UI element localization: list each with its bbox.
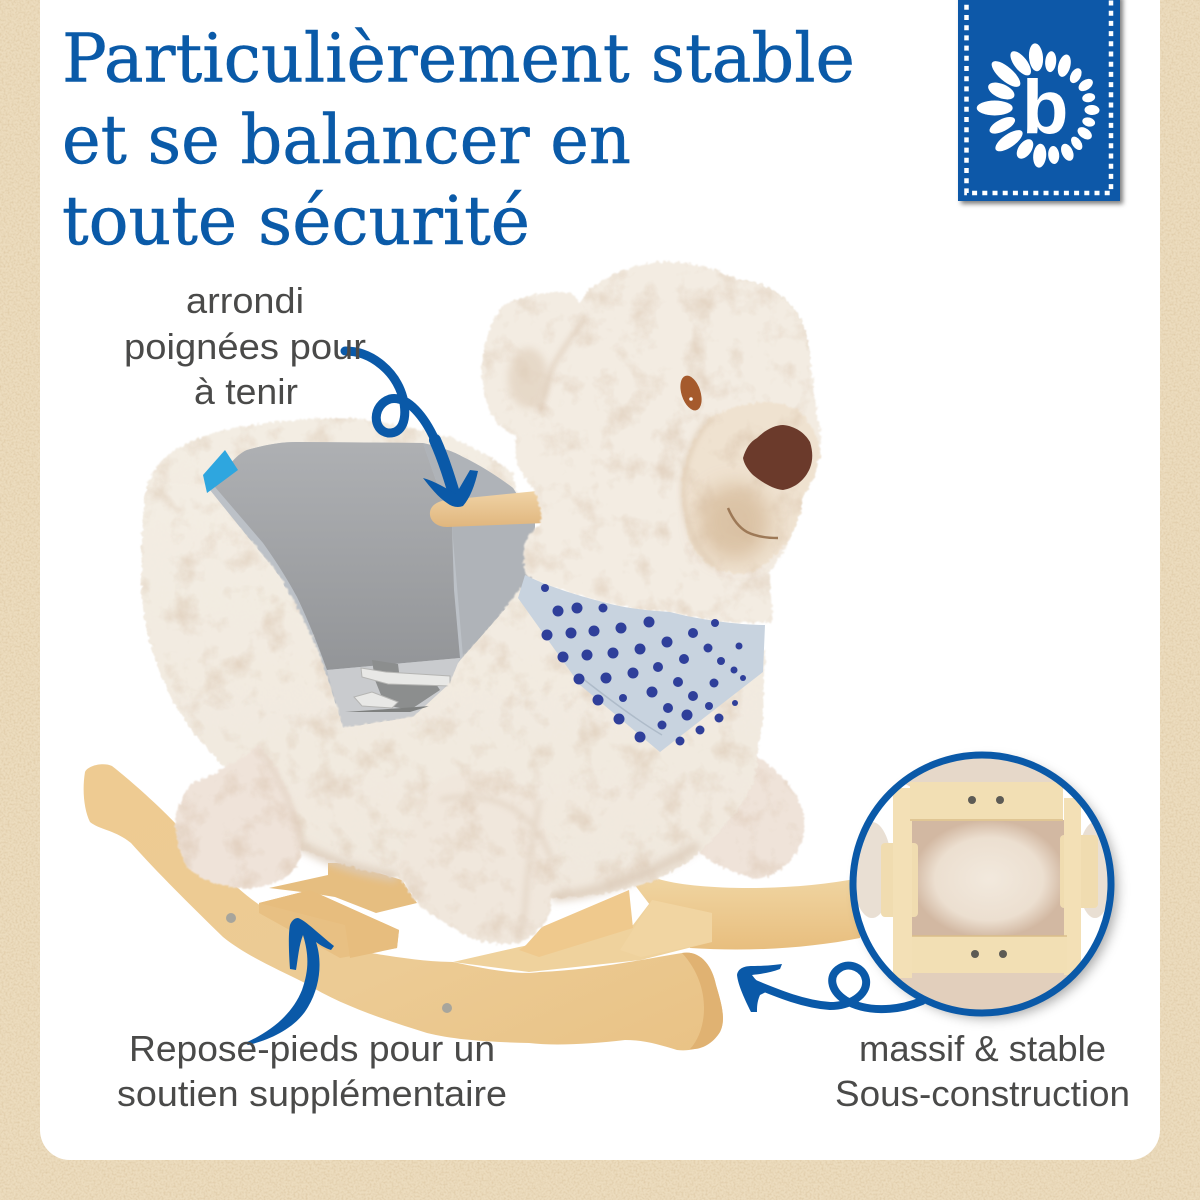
front fur: [142, 483, 763, 897]
seat back panel: [215, 442, 460, 670]
muzzle: [682, 402, 820, 573]
mouth: [728, 508, 778, 538]
label: construction: [835, 1028, 1130, 1114]
front rocker: [84, 764, 723, 1050]
arrow: construction: [737, 964, 922, 1012]
back rocker: [631, 877, 860, 950]
seat upholstery: [210, 442, 535, 728]
title: toute sécurité: [62, 182, 530, 260]
harness: [345, 660, 450, 712]
label: footrest: Repose-pieds pour un: [129, 1028, 495, 1069]
logo badge: b: [1022, 65, 1068, 150]
label: handles: poignées pour: [124, 326, 366, 367]
bear body and seat: [142, 418, 805, 944]
muzzle crease: [683, 418, 715, 567]
left ear: [482, 292, 587, 435]
rear cross piece: [269, 863, 417, 913]
eye: [676, 373, 706, 413]
label: handles: arrondi: [186, 280, 304, 321]
seat side panel: [423, 443, 535, 657]
title: [62, 20, 855, 260]
head shape: [516, 262, 821, 623]
centre leg: [397, 770, 552, 944]
footrest: [259, 890, 399, 958]
label: footrest: [117, 1028, 507, 1114]
blue label: [203, 450, 238, 493]
ear crease: [540, 315, 587, 412]
wooden bars: [910, 782, 1063, 821]
label: handles: [124, 280, 366, 412]
underside plush: [912, 820, 1066, 938]
seat floor: [327, 658, 460, 728]
nose: [743, 425, 812, 490]
back fur: [906, 758, 1055, 786]
label: construction: massif & stable: [859, 1028, 1106, 1069]
arrow: footrest: [245, 918, 334, 1045]
body shell: [142, 418, 765, 897]
wooden side tabs: [881, 843, 918, 917]
label: construction: Sous-construction: [835, 1073, 1130, 1114]
right ear: [737, 280, 809, 370]
wooden handle: [430, 491, 546, 527]
ear shade: [508, 348, 548, 408]
bear head: [482, 262, 821, 623]
left leg: [175, 745, 302, 888]
screws: [968, 796, 976, 804]
seat block: [519, 890, 633, 957]
wooden rails: [893, 788, 912, 978]
leg shading: [262, 750, 552, 940]
arrow: handle: [345, 351, 478, 507]
bandana: [518, 575, 765, 752]
body shading: [300, 845, 698, 897]
title: et se balancer en: [62, 101, 631, 179]
screws: [226, 913, 236, 923]
inset circle: underside construction: [852, 730, 1113, 1028]
label: footrest: soutien supplémentaire: [117, 1073, 507, 1114]
rear foot right: [698, 755, 805, 878]
logo badge: [958, 0, 1120, 201]
muzzle shade: [699, 484, 771, 560]
label: handles: à tenir: [194, 371, 298, 412]
rocking base: [84, 764, 860, 1050]
platform: [453, 900, 712, 972]
title: Particulièrement stable: [62, 20, 855, 98]
